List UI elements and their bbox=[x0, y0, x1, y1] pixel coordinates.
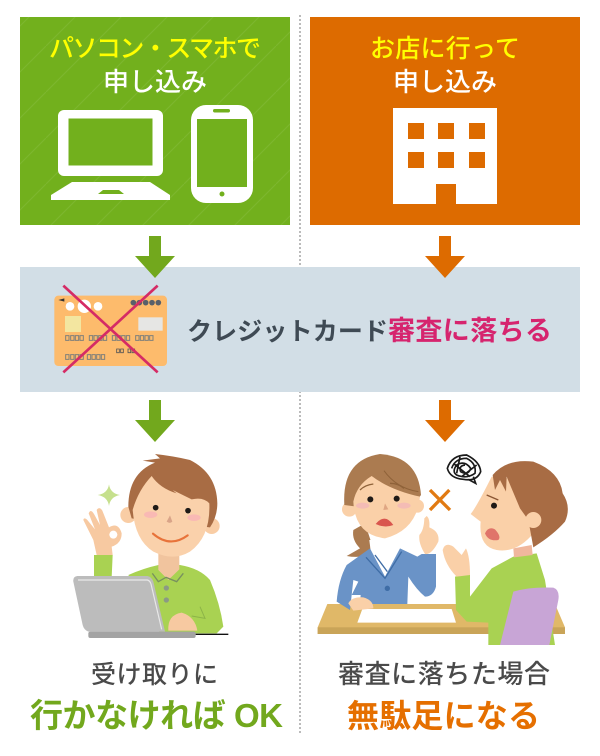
icon: scribble speech bubble bbox=[447, 455, 481, 483]
text: fail credit card screening: クレジットカード bbox=[187, 318, 388, 346]
text: OK if you do not go: 行かなければ OK bbox=[30, 697, 283, 734]
heading: go to a store: お店に行って bbox=[370, 35, 520, 63]
text: fail credit card screening bbox=[187, 316, 552, 346]
clerk hands bbox=[348, 516, 439, 611]
table bbox=[318, 604, 565, 634]
heading: PC and smartphone: パソコン・スマホで bbox=[49, 35, 261, 63]
arrow: green bottom bbox=[135, 400, 175, 442]
eyes and mouth bbox=[144, 505, 201, 541]
arrow: orange bottom bbox=[425, 400, 465, 442]
sparkle bbox=[98, 484, 120, 506]
panel: apply by PC or smartphone bbox=[20, 17, 290, 225]
face bbox=[133, 476, 209, 557]
heading: apply: 申し込み bbox=[103, 67, 207, 97]
text: no need to pick up: 受け取りに bbox=[91, 661, 218, 689]
icon: smartphone bbox=[191, 105, 253, 203]
arrow: green top bbox=[135, 236, 175, 278]
caption: right result bbox=[338, 659, 550, 734]
panel: credit card screening band bbox=[20, 267, 580, 392]
OK hand bbox=[83, 508, 122, 555]
text: fail credit card screening: 審査に落ちる bbox=[388, 316, 552, 346]
clerk bbox=[337, 454, 439, 611]
text: wasted trip: 無駄足になる bbox=[347, 698, 540, 734]
OK hand gap bbox=[109, 531, 117, 539]
chair bbox=[500, 587, 559, 645]
illustration: clerk and frustrated customer bbox=[318, 454, 568, 645]
hair back bbox=[128, 454, 217, 527]
icon: crossed-out credit card bbox=[54, 286, 167, 372]
caption: left result bbox=[30, 661, 283, 734]
lower hand bbox=[168, 613, 197, 631]
ears bbox=[120, 507, 220, 534]
illustration: man with laptop making OK sign bbox=[73, 454, 228, 638]
icon: orange cross bbox=[430, 490, 450, 510]
arrow: orange top bbox=[425, 236, 465, 278]
icon: laptop bbox=[51, 110, 170, 200]
text: if screening fails: 審査に落ちた場合 bbox=[338, 659, 550, 689]
shirt bbox=[94, 553, 223, 633]
heading: apply: 申し込み bbox=[393, 67, 497, 97]
laptop bbox=[73, 576, 228, 638]
panel: apply at a store bbox=[310, 17, 580, 225]
icon: building bbox=[393, 108, 497, 204]
customer bbox=[443, 461, 568, 645]
